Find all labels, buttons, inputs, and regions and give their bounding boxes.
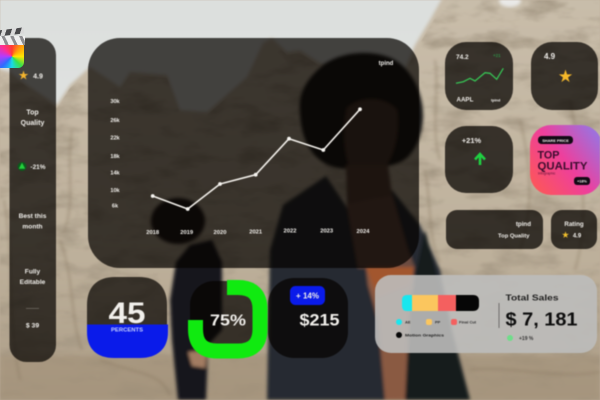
small figure [151, 198, 222, 400]
ring arc [196, 288, 260, 351]
icon: star rating [19, 70, 28, 80]
big number: 45 [108, 297, 146, 330]
change: +21 [493, 53, 501, 58]
y axis labels [110, 99, 121, 210]
percents label: PERCENTS [111, 328, 144, 334]
icon: star [562, 231, 569, 238]
legend: Motion Graphics [405, 332, 445, 338]
panel: star score [531, 42, 598, 110]
y axis labels: 30k [110, 99, 121, 105]
x axis labels: 2024 [357, 229, 370, 235]
panel: 45 percents [87, 277, 168, 358]
panel: price change [268, 278, 348, 358]
line series [151, 107, 362, 211]
ticker: AAPL [456, 96, 474, 104]
x axis labels [146, 228, 370, 236]
panel: plus 21 percent [445, 126, 513, 193]
y axis labels: 14k [110, 171, 121, 177]
fully editable label: Fully [25, 268, 41, 276]
sales change [507, 335, 534, 342]
icon: app logo clapperboard [0, 28, 25, 68]
card subtitle: Infographic [538, 172, 556, 176]
rating heading: Rating [564, 221, 584, 228]
card title: TOP [538, 150, 560, 162]
x axis labels: 2018 [146, 230, 160, 236]
panel: AAPL sparkline [445, 42, 513, 110]
value: 74.2 [456, 54, 469, 61]
icon: green triangle [18, 162, 26, 171]
icon: star [559, 70, 572, 82]
x axis labels: 2023 [320, 228, 334, 234]
card title [538, 150, 588, 172]
stacked bar [402, 295, 479, 311]
rating value: 4.9 [573, 234, 582, 240]
legend: AE [405, 320, 411, 324]
fully editable label: Editable [20, 279, 46, 286]
x axis labels: 2020 [214, 230, 226, 236]
panel: top quality card [530, 125, 600, 195]
sales value: $ 7, 181 [506, 308, 578, 330]
badge: share price: SHARE PRICE [542, 138, 569, 143]
x axis labels: 2021 [249, 230, 263, 236]
y axis labels: 10k [110, 188, 121, 194]
y axis labels: 22k [110, 136, 121, 142]
ring value: 75% [210, 312, 246, 330]
best this month label: month [22, 224, 43, 230]
panel: tpind label [446, 210, 543, 249]
y axis labels: 6k [112, 204, 119, 210]
panel: total sales [375, 275, 597, 353]
subtitle: Top Quality [498, 234, 530, 240]
brand: tpind [516, 221, 531, 228]
change value: -21% [30, 164, 46, 171]
top quality label: Quality [21, 120, 44, 127]
sales heading: Total Sales [506, 292, 559, 302]
panel: 75 percent ring [190, 281, 266, 357]
panel: rating [551, 210, 597, 249]
y axis labels: 18k [110, 154, 121, 160]
price value: $215 [300, 312, 340, 330]
large figure [267, 53, 470, 400]
best this month label: Best this [19, 213, 47, 220]
badge: percent: +18% [577, 180, 588, 184]
brand: tpind [491, 98, 501, 102]
top quality label: Top [26, 110, 39, 116]
x axis labels: 2022 [284, 228, 296, 234]
panel: line chart [88, 38, 419, 268]
chart brand: tpind [379, 61, 394, 67]
legend [396, 319, 477, 338]
sales change: +19 % [519, 336, 534, 342]
change value: +21% [462, 136, 482, 145]
x axis labels: 2019 [180, 230, 194, 236]
price: $ 39 [26, 322, 39, 330]
score: 4.9 [544, 52, 556, 61]
card title: QUALITY [538, 160, 588, 172]
badge: plus 14 percent: + 14% [296, 292, 319, 300]
panel: left vertical list [10, 38, 56, 362]
sparkline [456, 68, 503, 83]
rating value: 4.9 [33, 74, 43, 80]
y axis labels: 26k [110, 118, 121, 124]
legend: PP [435, 320, 441, 324]
legend: Final Cut [459, 320, 477, 324]
icon: up arrow [475, 154, 485, 165]
